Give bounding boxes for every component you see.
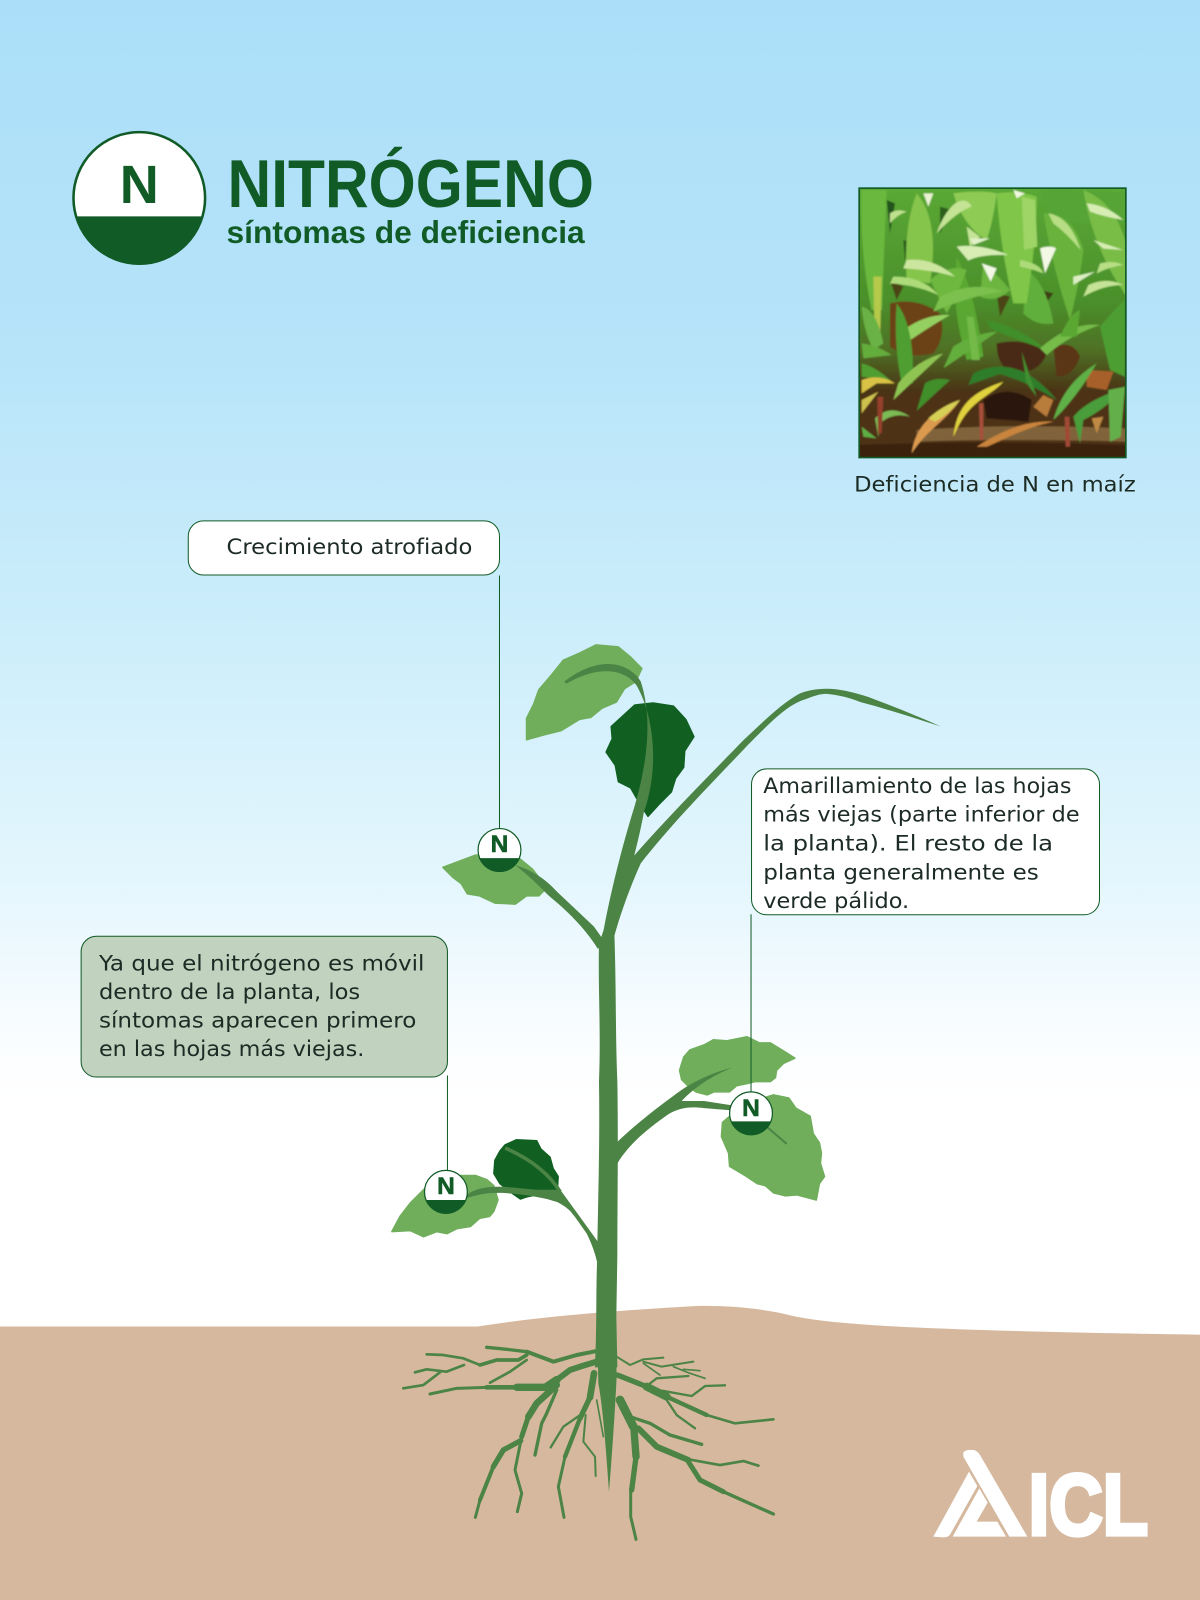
callout: stunted growth: Crecimiento atrofiado: [227, 535, 472, 560]
midrib: lower left dark leaf: [505, 1148, 560, 1192]
title: NITRÓGENO: [228, 147, 594, 222]
leaf: lower left dark: [494, 1140, 558, 1199]
back leaves: [906, 193, 933, 283]
stem: upper curved: [564, 664, 653, 940]
logo: ICL: ICL: [1029, 1458, 1148, 1554]
logo: ICL: [933, 1450, 1148, 1554]
icon: N badge on middle leaf: N: [491, 831, 508, 858]
icon: N badge on lower right leaf: [730, 1092, 772, 1135]
midrib: lower right leaf: [765, 1126, 787, 1144]
callout: yellowing of older leaves: Amarillamiento de las hojas: [763, 774, 1071, 799]
icon: nitrogen badge: [73, 132, 205, 264]
soil ground: [0, 1306, 1200, 1600]
callout: yellowing of older leaves: la planta). El resto de la: [763, 832, 1053, 857]
stem: right long leaf blade: [608, 689, 941, 940]
callout: yellowing of older leaves: verde pálido.: [763, 889, 909, 914]
stem: lower right branches: [616, 1067, 733, 1165]
leaf: lower right large: [721, 1095, 824, 1200]
callout: nitrogen mobility: dentro de la planta, los: [99, 980, 360, 1005]
roots: [403, 1310, 773, 1539]
soil patches: [890, 301, 942, 356]
header: nitrogen title block: [73, 132, 594, 264]
callout: yellowing of older leaves: [751, 769, 1099, 1092]
callout: yellowing of older leaves: planta generalmente es: [763, 861, 1039, 886]
main tall leaves: [861, 190, 887, 310]
icon: N badge on lower right leaf: N: [742, 1095, 760, 1122]
leaf: top light: [527, 645, 642, 740]
icon: N badge on lower left leaf: [424, 1170, 467, 1214]
callout: nitrogen mobility: síntomas aparecen primero: [99, 1009, 416, 1034]
stem: middle left branch: [515, 865, 604, 949]
icon: N badge on lower left leaf: N: [437, 1173, 455, 1200]
stem: main: [595, 929, 618, 1367]
stem: lower left branch: [466, 1187, 598, 1266]
subtitle: síntomas de deficiencia: [227, 214, 585, 250]
photo caption: Deficiencia de N en maíz: [854, 472, 1136, 497]
callout: nitrogen mobility: [81, 936, 447, 1171]
dark gaps: [887, 200, 895, 233]
callout: yellowing of older leaves: más viejas (parte inferior de: [763, 802, 1080, 827]
callout: nitrogen mobility: en las hojas más viejas.: [99, 1037, 364, 1062]
plant illustration: [392, 645, 941, 1539]
photo: corn field with nitrogen deficiency: [858, 187, 1127, 458]
callout: stunted growth: [188, 521, 499, 829]
leaf: lower right upper: [680, 1037, 795, 1095]
leaf: middle left: [443, 855, 547, 904]
leaf: lower left light: [392, 1176, 498, 1237]
leaf: upper dark: [606, 703, 694, 816]
callout: nitrogen mobility: Ya que el nitrógeno es móvil: [98, 951, 424, 976]
pale highlight leaves: [957, 246, 1008, 261]
yellow lower leaves and stems: [862, 377, 895, 393]
icon: N badge on middle leaf: [478, 829, 521, 872]
icon: nitrogen badge: N: [120, 155, 159, 215]
mid leaves: [933, 287, 1003, 312]
